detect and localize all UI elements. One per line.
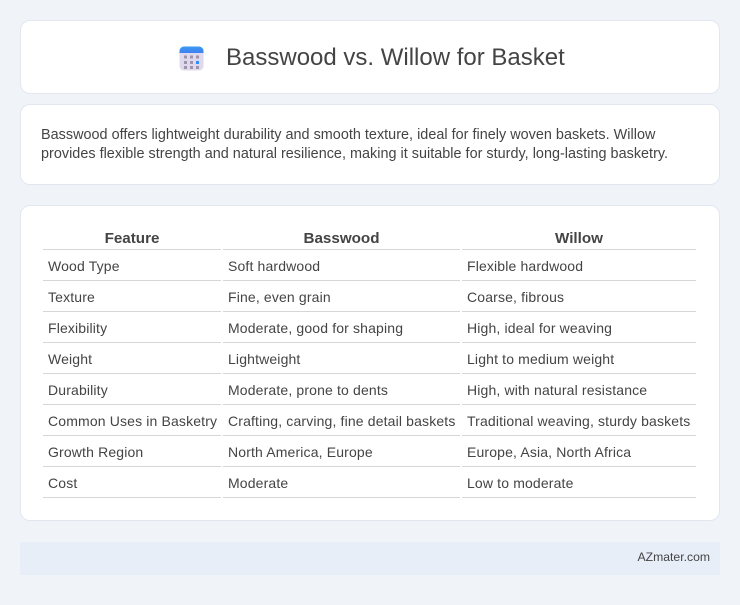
table: High, ideal for weaving [467,320,612,336]
table: Flexibility [48,320,107,336]
table: Weight [48,351,92,367]
table: Coarse, fibrous [467,289,564,305]
intro paragraph: provides flexible strength and natural resilience, making it suitable for sturdy, long-lasting basketry. [41,146,668,162]
table: Traditional weaving, sturdy baskets [467,413,690,429]
footer brand: AZmater.com [638,550,710,564]
panel: intro text [20,104,720,185]
table: Willow [555,230,603,247]
table: Cost [48,475,77,491]
icon: calendar [180,46,204,70]
table: Lightweight [228,351,300,367]
intro paragraph: Basswood offers lightweight durability and smooth texture, ideal for finely woven baskets. Willow [41,127,655,143]
table: Light to medium weight [467,351,614,367]
table: Texture [48,289,95,305]
table: Wood Type [48,258,120,274]
table: Common Uses in Basketry [48,413,217,429]
table: Moderate [228,475,288,491]
table: Growth Region [48,444,143,460]
table: Crafting, carving, fine detail baskets [228,413,455,429]
footer bar [20,542,720,575]
table: High, with natural resistance [467,382,647,398]
table: Europe, Asia, North Africa [467,444,631,460]
table: Moderate, prone to dents [228,382,388,398]
table: Flexible hardwood [467,258,583,274]
table: Basswood [304,230,379,247]
title: Basswood vs. Willow for Basket [226,44,565,71]
table: Durability [48,382,108,398]
table: Low to moderate [467,475,574,491]
table [43,230,696,498]
table: Fine, even grain [228,289,331,305]
table: Feature [105,230,159,247]
intro paragraph [41,127,668,162]
panel: comparison table [20,205,720,521]
panel: title card [20,20,720,94]
table: Moderate, good for shaping [228,320,403,336]
table: Soft hardwood [228,258,320,274]
table: North America, Europe [228,444,373,460]
